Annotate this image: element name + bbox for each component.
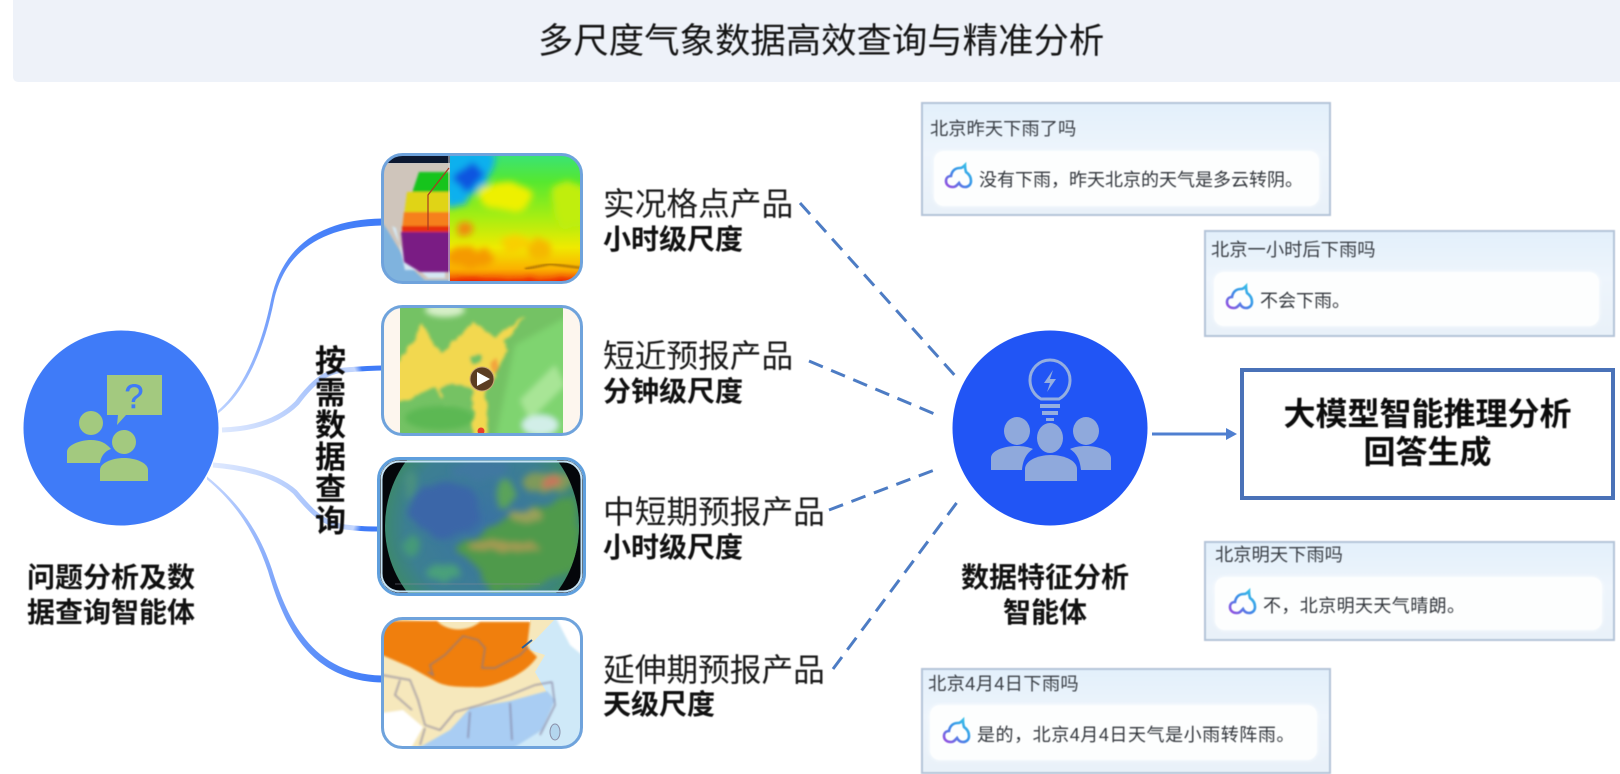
- product label 3: 中短期预报产品: [603, 494, 825, 530]
- icon: cloud: [1228, 588, 1257, 615]
- link: to extended range product: [207, 476, 384, 682]
- dashed link 3: [829, 469, 937, 510]
- chat card 3: [1204, 541, 1615, 641]
- answer panel: [1214, 272, 1599, 326]
- scale label 1: 小时级尺度: [603, 224, 743, 255]
- result text: 回答生成: [1363, 434, 1492, 470]
- answer panel: [930, 705, 1317, 760]
- icon: cloud: [944, 162, 973, 189]
- answer panel: [934, 151, 1319, 206]
- product label 4: 延伸期预报产品: [603, 652, 825, 688]
- scale label 3: 小时级尺度: [603, 532, 743, 563]
- icon: lightbulb and team: [991, 360, 1111, 481]
- answer: 没有下雨，昨天北京的天气是多云转阴。: [979, 170, 1303, 190]
- query agent label: [27, 562, 196, 628]
- question: 北京4月4日下雨吗: [928, 673, 1079, 694]
- answer: 是的，北京4月4日天气是小雨转阵雨。: [977, 725, 1295, 745]
- answer: 不会下雨。: [1260, 291, 1350, 311]
- chat card 4: [921, 668, 1331, 774]
- scale label 2: 分钟级尺度: [603, 376, 743, 407]
- arrow to result box: [1152, 428, 1237, 440]
- analysis agent label: [961, 562, 1129, 628]
- title: 多尺度气象数据高效查询与精准分析: [538, 21, 1104, 61]
- product label 1: 实况格点产品: [603, 186, 793, 222]
- analysis agent label: 数据特征分析: [961, 562, 1129, 593]
- dashed link 4: [833, 497, 961, 669]
- query agent circle with icon: [24, 330, 218, 526]
- scale label 4: 天级尺度: [603, 689, 715, 720]
- analysis agent circle with icon: [952, 330, 1148, 526]
- dashed link 2: [809, 361, 937, 415]
- link: to medium range product: [213, 465, 382, 529]
- link: to nowcast product: [222, 368, 382, 430]
- question: 北京昨天下雨了吗: [930, 118, 1076, 139]
- icon: play button: [470, 367, 494, 391]
- question: 北京一小时后下雨吗: [1211, 239, 1376, 260]
- vertical label: on-demand data query: 按需数据查询: [315, 344, 346, 539]
- icon: people asking question: [67, 375, 162, 481]
- result box: model inference: [1240, 368, 1615, 500]
- image card: extended range map: [381, 617, 583, 749]
- analysis agent label: 智能体: [1003, 597, 1087, 628]
- query agent label: 问题分析及数: [27, 562, 195, 593]
- chat card 2: [1204, 230, 1615, 337]
- question: 北京明天下雨吗: [1215, 544, 1343, 565]
- image card: nowcast rainfall map: [381, 305, 583, 436]
- dashed link 1: [800, 203, 958, 379]
- query agent label: 据查询智能体: [27, 597, 195, 628]
- icon: cloud: [1225, 282, 1254, 310]
- icon: cloud: [942, 716, 971, 744]
- title banner: [13, 0, 1620, 82]
- image card: medium range globe: [377, 457, 586, 596]
- icon: people asking question: ?: [125, 378, 143, 416]
- result text: [1283, 396, 1572, 470]
- image card: live grid heat map: [381, 153, 583, 284]
- answer panel: [1215, 577, 1602, 630]
- link: to live grid product: [218, 218, 382, 414]
- product label 2: 短近预报产品: [603, 338, 793, 374]
- chat card 1: [921, 102, 1331, 216]
- answer: 不，北京明天天气晴朗。: [1263, 596, 1465, 616]
- result text: 大模型智能推理分析: [1283, 396, 1572, 432]
